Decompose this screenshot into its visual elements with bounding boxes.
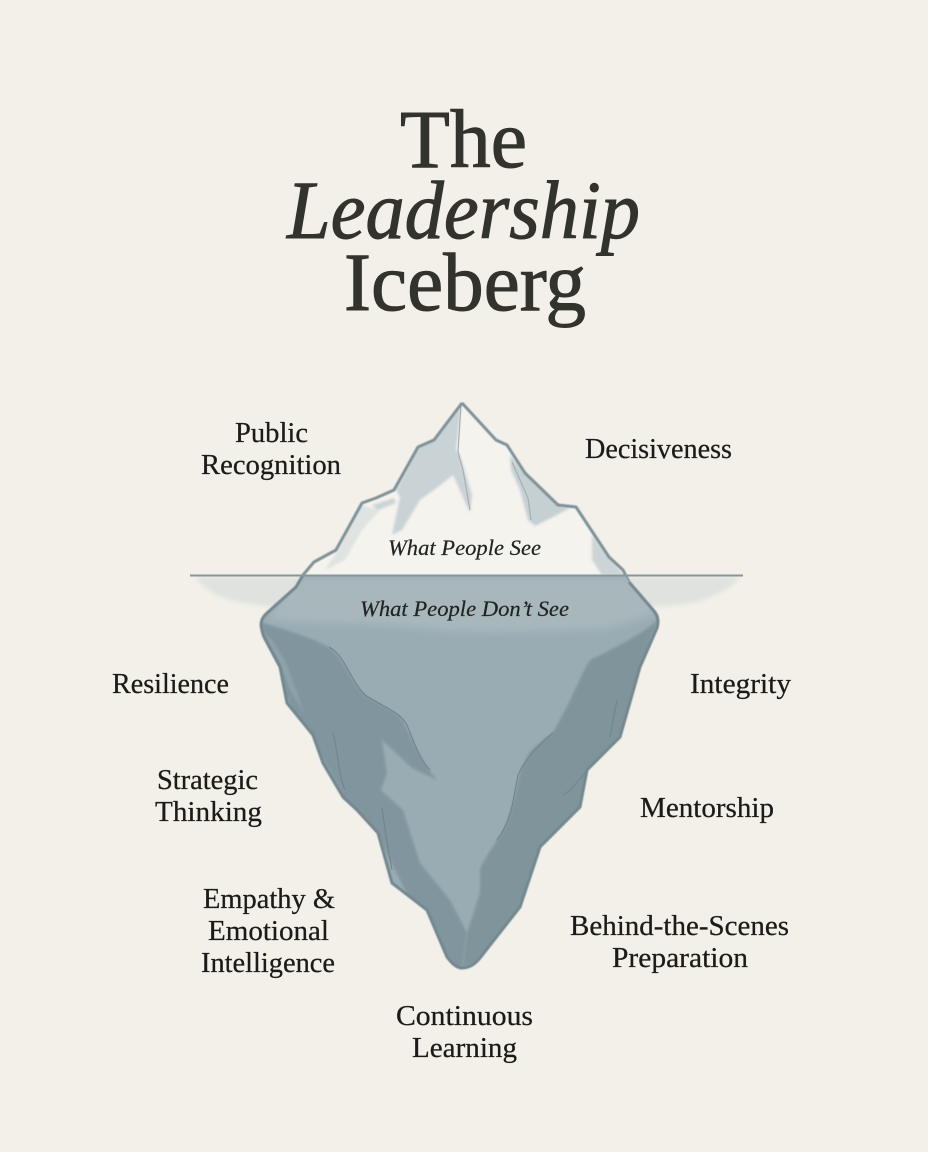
caption: what people don't see: What People Don’t See bbox=[360, 596, 569, 621]
label: integrity: Integrity bbox=[690, 669, 791, 700]
label: public recognition: Public bbox=[235, 418, 308, 449]
label: empathy and emotional intelligence: Intelligence bbox=[201, 948, 335, 979]
crease lines bbox=[329, 647, 430, 770]
right shaded face bbox=[462, 620, 658, 968]
iceberg below water bbox=[260, 575, 660, 968]
label: strategic thinking bbox=[155, 765, 262, 828]
label: continuous learning: Continuous bbox=[396, 1001, 533, 1032]
left shaded face bbox=[260, 622, 467, 968]
waterline bbox=[190, 574, 743, 576]
label: strategic thinking: Thinking bbox=[155, 797, 262, 828]
label: continuous learning: Learning bbox=[412, 1033, 517, 1064]
label: empathy and emotional intelligence bbox=[201, 884, 335, 979]
label: public recognition: Recognition bbox=[201, 450, 341, 481]
iceberg above water bbox=[303, 403, 629, 582]
title: Iceberg bbox=[344, 236, 586, 328]
label: continuous learning bbox=[396, 1001, 533, 1064]
caption: what people see: What People See bbox=[388, 535, 541, 560]
label: mentorship: Mentorship bbox=[640, 793, 774, 824]
label: public recognition bbox=[201, 418, 341, 481]
label: behind-the-scenes preparation: Behind-the-Scenes bbox=[570, 911, 789, 942]
label: behind-the-scenes preparation: Preparation bbox=[612, 943, 748, 974]
label: resilience: Resilience bbox=[112, 669, 229, 700]
light band under waterline bbox=[270, 578, 660, 632]
label: decisiveness: Decisiveness bbox=[585, 434, 732, 465]
label: behind-the-scenes preparation bbox=[570, 911, 789, 974]
label: empathy and emotional intelligence: Empathy & bbox=[203, 884, 335, 915]
title bbox=[286, 93, 640, 328]
berg outline bbox=[261, 575, 658, 968]
title: The bbox=[400, 93, 527, 185]
iceberg illustration bbox=[190, 403, 743, 968]
label: strategic thinking: Strategic bbox=[157, 765, 258, 796]
title: Leadership bbox=[286, 164, 640, 256]
water shadow bbox=[195, 577, 740, 606]
label: empathy and emotional intelligence: Emotional bbox=[208, 916, 329, 947]
left outer wash bbox=[267, 637, 300, 705]
